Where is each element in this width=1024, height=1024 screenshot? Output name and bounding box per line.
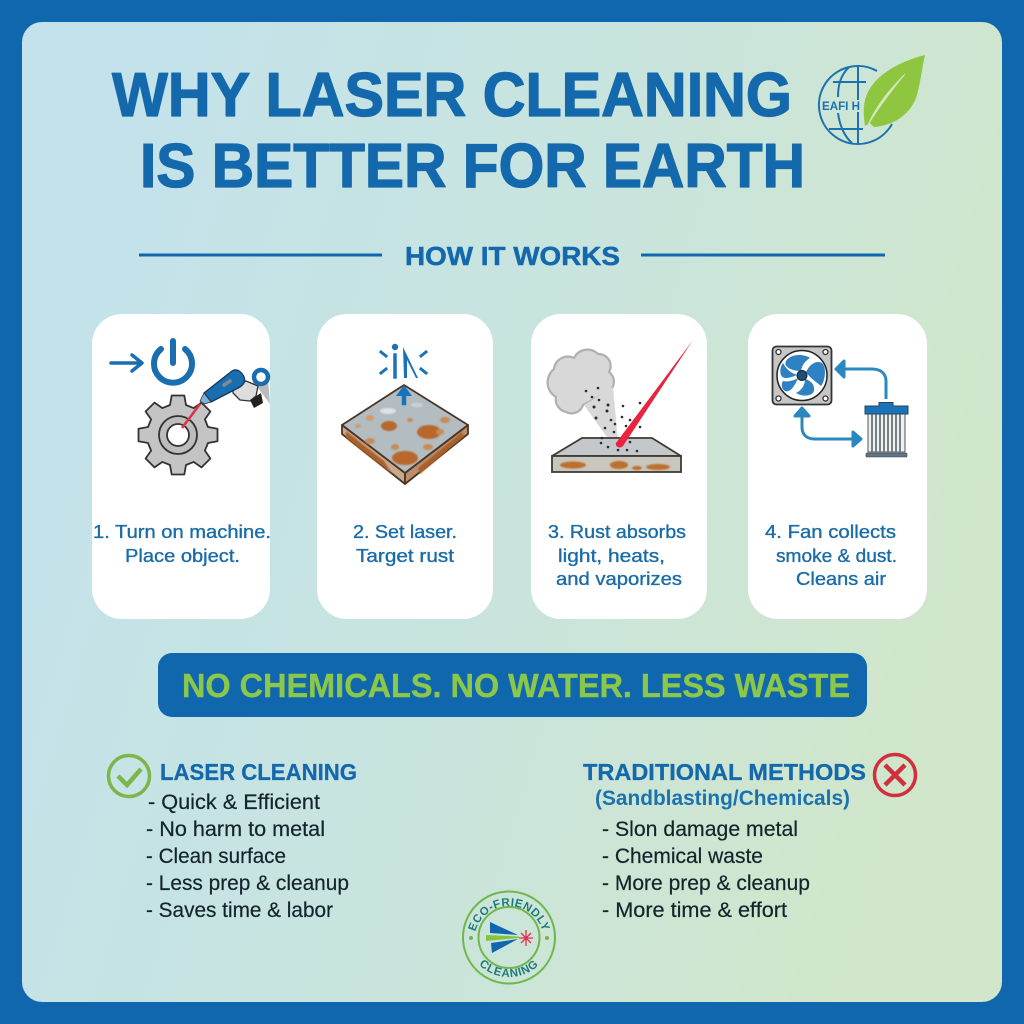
icon: earth globe with leaf: EAFI H: [822, 99, 860, 113]
list: traditional drawbacks: - More time & effort: [602, 899, 787, 922]
icon: arrow to power: [111, 355, 142, 371]
title: IS BETTER FOR EARTH: [140, 132, 805, 201]
panel: step 3: [531, 314, 707, 619]
icon: gear: [138, 396, 218, 474]
badge: eco-friendly cleaning: ECO-FRIENDLY: [468, 898, 550, 931]
step 2 text: 2. Set laser.: [353, 522, 457, 542]
banner: [158, 653, 867, 717]
step 3 text: 3. Rust absorbs: [548, 522, 686, 542]
banner: NO CHEMICALS. NO WATER. LESS WASTE: [182, 667, 850, 704]
panel: laser cleaning list: [108, 756, 357, 922]
icon: arrow filter to fan: [836, 361, 886, 399]
icon: smoke cloud: [548, 350, 618, 442]
icon: green check: [108, 756, 150, 796]
icon: arrow fan to filter: [795, 408, 861, 446]
step 2 text: [353, 522, 457, 566]
icon: laser beam on gear: [182, 404, 200, 428]
step 3 text: [548, 522, 686, 589]
panel: traditional methods list: [583, 754, 916, 922]
list: laser benefits: - Clean surface: [146, 845, 286, 868]
list: laser benefits: - Saves time & labor: [146, 899, 333, 922]
panel: step 4: [748, 314, 927, 619]
list: traditional drawbacks: - More prep & cleanup: [602, 872, 810, 895]
badge: eco-friendly cleaning: CLEANING: [480, 960, 538, 978]
list: traditional drawbacks: [602, 818, 810, 922]
step 3 text: light, heats,: [558, 546, 665, 566]
section heading: how it works: HOW IT WORKS: [405, 241, 620, 271]
icon: red laser beam: [616, 340, 693, 447]
icon: power button: [154, 341, 192, 383]
panel: step 1: [92, 314, 271, 619]
step 4 text: Cleans air: [796, 569, 886, 589]
title: [112, 61, 805, 201]
title: WHY LASER CLEANING: [112, 61, 792, 130]
icon: metal slab: [552, 437, 681, 472]
icon: dust particles: [585, 387, 641, 433]
step 3 text: and vaporizes: [556, 569, 682, 589]
icon: rusty metal plate: [342, 385, 468, 484]
icon: laser tool in hand: [200, 370, 270, 408]
step 1 text: Place object.: [125, 546, 240, 566]
step 4 text: [765, 522, 897, 589]
list: laser benefits: [146, 791, 349, 922]
step 4 text: smoke & dust.: [776, 546, 897, 566]
list: laser benefits: - Quick & Efficient: [148, 791, 320, 814]
icon: fan: [772, 346, 832, 404]
heading: traditional methods: [583, 759, 866, 810]
heading: laser cleaning: LASER CLEANING: [160, 759, 357, 785]
step 1 text: [93, 522, 271, 566]
list: laser benefits: - Less prep & cleanup: [146, 872, 349, 895]
list: traditional drawbacks: - Slon damage metal: [602, 818, 798, 841]
heading: traditional methods: TRADITIONAL METHODS: [583, 759, 866, 785]
section heading: how it works: [139, 241, 885, 271]
badge: eco-friendly cleaning: [462, 890, 556, 984]
panel: step 2: [317, 314, 493, 619]
step 2 text: Target rust: [356, 546, 454, 566]
list: laser benefits: - No harm to metal: [146, 818, 325, 841]
icon: laser target symbol: [381, 344, 426, 403]
step 4 text: 4. Fan collects: [765, 522, 896, 542]
icon: red cross: [874, 754, 916, 796]
list: traditional drawbacks: - Chemical waste: [602, 845, 763, 868]
icon: earth globe with leaf: [819, 55, 925, 144]
icon: air filter: [865, 402, 908, 457]
step 1 text: 1. Turn on machine.: [93, 522, 271, 542]
heading: traditional methods: (Sandblasting/Chemicals): [595, 787, 850, 810]
